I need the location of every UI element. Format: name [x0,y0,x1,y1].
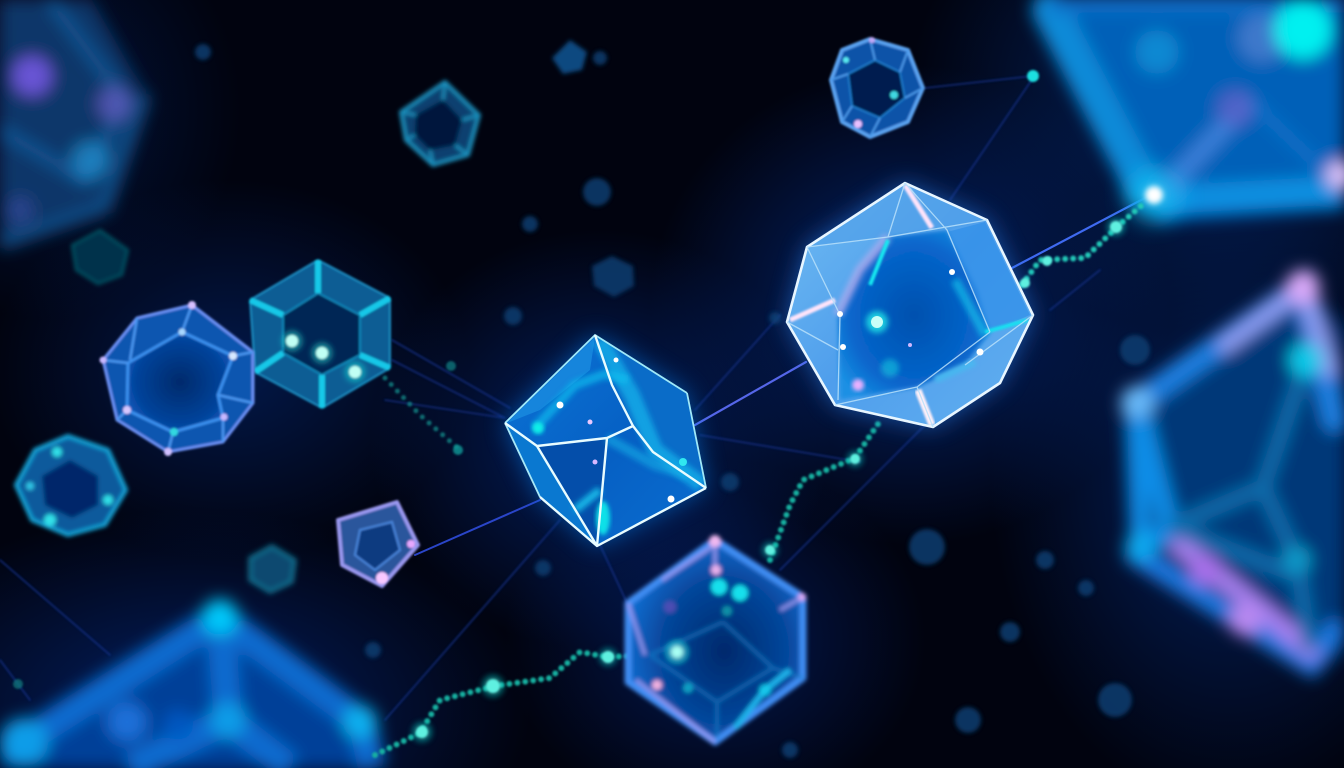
glowing beads [13,70,1125,742]
crystal: small top [552,40,587,74]
bead chains [375,205,1142,755]
crystal: lower-left teal [16,436,126,535]
crystal: teal hexagon [250,260,390,408]
crystal: right blurred [1120,270,1344,678]
network lines [0,76,1145,720]
crystal: large octagon [787,183,1033,427]
background specks [195,44,1150,758]
crystal: top-right blurred [1035,0,1344,222]
crystal: left dodecahedron [100,301,253,456]
crystal: small top centre-left [401,82,479,165]
crystal: central cube [505,335,706,546]
crystal: top-left blurred [0,0,146,245]
crystal: small teal blurred [250,546,295,592]
crystal: bottom-left blurred [0,599,378,768]
crystal: small violet pentagon [338,502,418,586]
crystal: lower icosahedron [628,535,806,742]
glowing node: top-right [1128,169,1180,221]
crystal: top octagon [831,37,923,137]
crystal: dark left hexagon [72,230,128,284]
